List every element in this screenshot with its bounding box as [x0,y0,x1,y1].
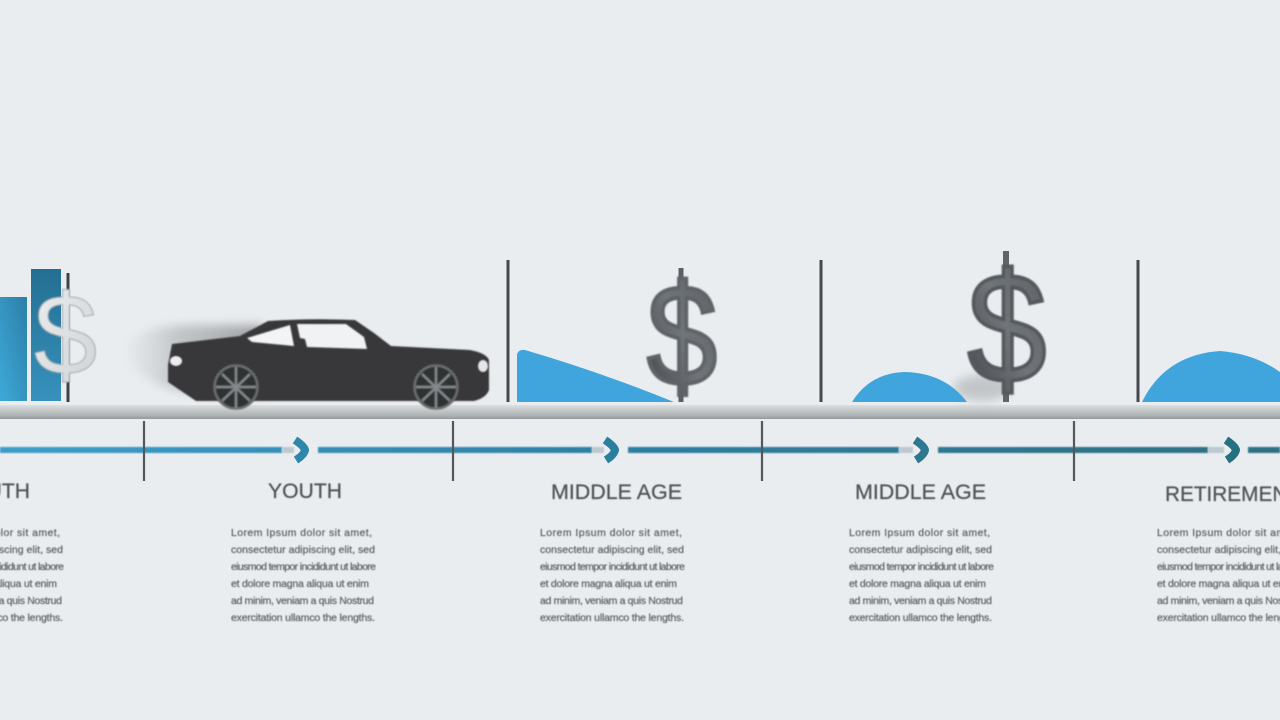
divider line [66,273,70,402]
heading: MIDDLE AGE [855,481,986,504]
icon: dollar sign: $ [968,241,1046,415]
body text [0,527,64,624]
body text: ad minim, veniam a quis Nostrud [849,595,992,607]
heading: MIDDLE AGE [551,481,682,504]
body text [540,527,685,624]
body text: eiusmod tempor incididunt ut labore [849,561,994,573]
column: middle age two [849,481,994,624]
divider line [820,260,822,402]
panel: youth chart with bars and dollar sign [0,269,97,402]
body text: consectetur adipiscing elit, sed [849,544,992,556]
arrow: middle age two [915,440,925,460]
panel: first middle age chart [506,255,717,416]
motion trail [122,325,262,392]
rear wheel [214,366,258,408]
timeline [0,421,1280,481]
arrow connectors [282,447,1224,453]
panel: retirement chart [1136,260,1280,402]
body text: ad minim, veniam a quis Nostrud [231,595,374,607]
body text: Lorem Ipsum dolor sit amet, [849,527,990,539]
blue dome shape [852,372,967,402]
blue area shape [517,350,674,402]
front window [297,324,367,349]
body text: et dolore magna aliqua ut enim [231,578,369,590]
heading: YOUTH [268,480,342,503]
body text: exercitation ullamco the lengths. [540,612,684,624]
icon: dollar sign: $ [647,255,717,416]
front light [478,360,488,372]
column: retirement [1157,483,1280,624]
column: youth clipped [0,480,64,624]
arrow: middle age [605,440,615,460]
body text: exercitation ullamco the lengths. [849,612,992,624]
icon: silver dollar sign: $ [34,272,97,399]
body text [849,527,994,624]
rear window [247,325,294,346]
blue dome shape [1142,351,1280,402]
shadow smudge [954,375,1010,401]
body text [231,527,376,624]
column: youth [231,480,376,624]
road [0,405,1280,419]
body text: eiusmod tempor incididunt ut labore [540,561,685,573]
panel: second middle age chart [820,241,1046,415]
divider line [506,260,510,402]
body text: Lorem Ipsum dolor sit amet, [540,527,682,539]
body text [1157,527,1280,624]
body text: eiusmod tempor incididunt ut labore [231,561,376,573]
column: middle age [540,481,685,624]
bar: tall [31,269,61,401]
bar: short [0,297,27,401]
car body [168,319,489,401]
dollar stem [1003,251,1009,402]
arrow: youth [295,440,305,460]
body text: ad minim, veniam a quis Nostrud [540,595,683,607]
divider line [1136,260,1140,402]
body text: consectetur adipiscing elit, sed [540,544,684,556]
body text: et dolore magna aliqua ut enim [540,578,677,590]
tick marks [144,421,1074,481]
body text: et dolore magna aliqua ut enim [849,578,986,590]
icon: car with motion blur [122,319,489,408]
arrow: retirement [1226,440,1236,460]
dollar stem [678,268,684,402]
front wheel [414,366,458,408]
body text: Lorem Ipsum dolor sit amet, [231,527,372,539]
body text: exercitation ullamco the lengths. [231,612,375,624]
timeline bar [0,447,1280,453]
rear light [170,356,182,366]
body text: consectetur adipiscing elit, sed [231,544,375,556]
